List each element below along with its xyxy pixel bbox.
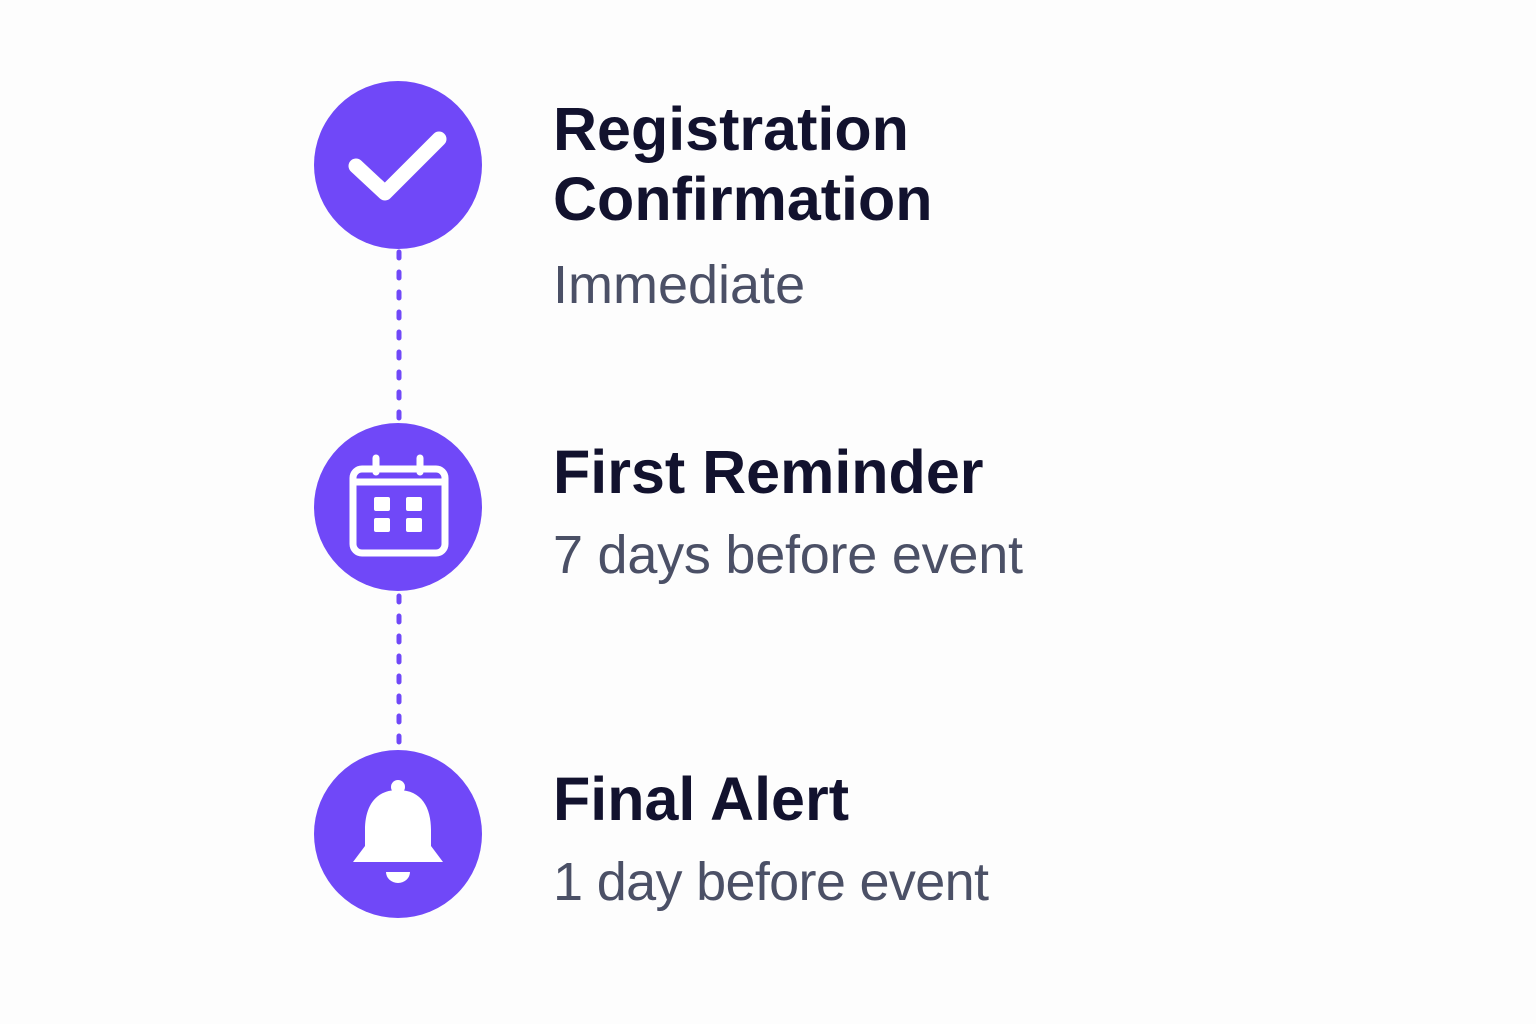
- text: step 2: 7 days before event: [553, 525, 1023, 585]
- text: step 1: Immediate: [553, 255, 805, 315]
- icon: checkmark circle: [314, 81, 482, 249]
- icon: calendar circle: [314, 423, 482, 591]
- text: step 3: Final Alert: [553, 765, 849, 833]
- connector: dotted line 1: [396, 252, 402, 420]
- text: step 2: First Reminder: [553, 438, 984, 506]
- text: step 3: [553, 765, 989, 912]
- text: step 2: [553, 438, 1023, 585]
- text: step 1: [553, 95, 933, 315]
- text: step 3: 1 day before event: [553, 852, 989, 912]
- text: step 1: Registration: [553, 95, 909, 163]
- text: step 1: Confirmation: [553, 165, 933, 233]
- connector: dotted line 2: [396, 596, 402, 748]
- icon: bell circle: [314, 750, 482, 918]
